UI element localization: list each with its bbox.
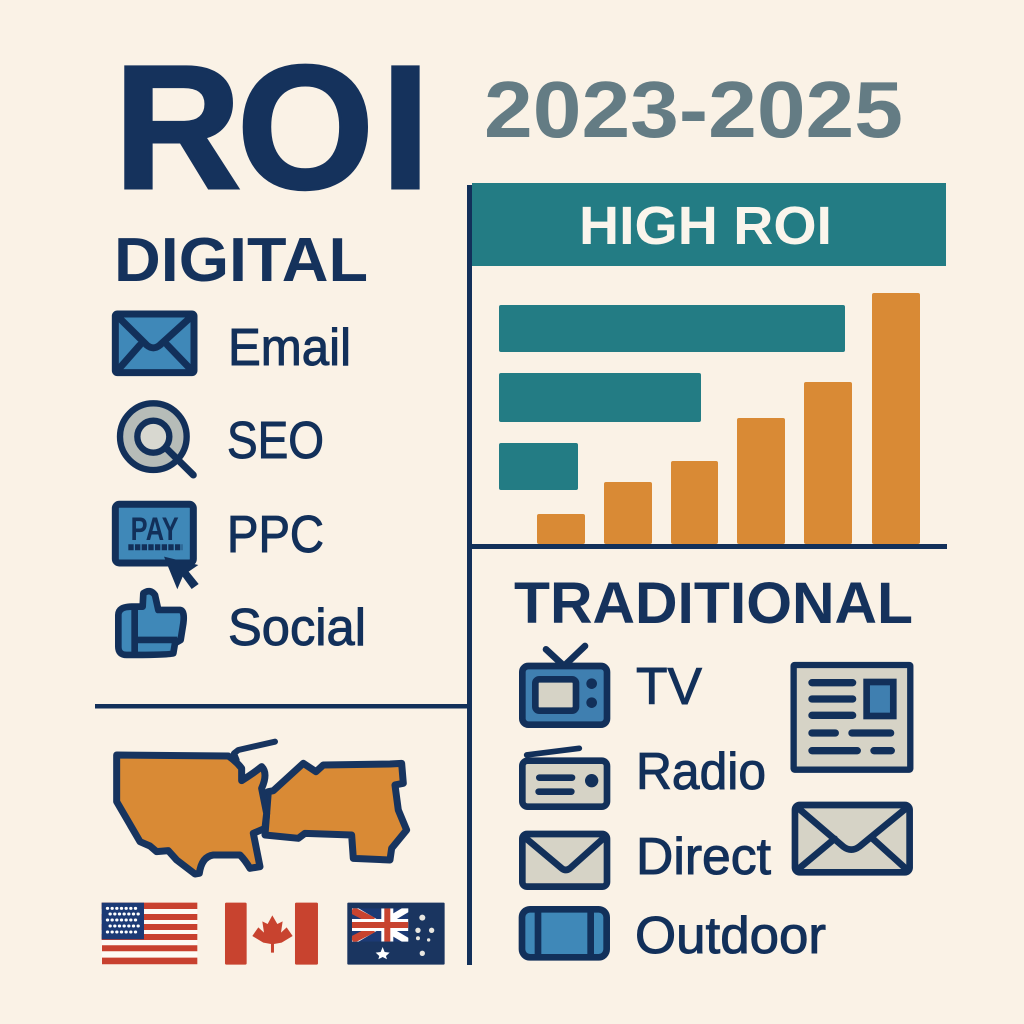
icon: SEO magnifier <box>120 403 193 475</box>
icon: social thumbs up <box>118 591 184 655</box>
icon: direct mail <box>522 834 607 887</box>
icon: email <box>115 314 194 373</box>
label: PPC: PPC <box>227 506 324 564</box>
title: ROI: ROI <box>114 30 430 226</box>
label: Outdoor: Outdoor <box>635 907 826 965</box>
label: SEO: SEO <box>227 412 324 470</box>
divider: left horizontal <box>95 704 469 708</box>
icon: PPC pay button <box>115 504 199 589</box>
flag: Canada <box>225 903 318 965</box>
chart: teal horizontal bars <box>499 305 845 490</box>
icon: TV <box>522 646 607 725</box>
icon: outdoor billboard <box>522 909 607 957</box>
flag: Australia <box>347 903 445 965</box>
label: Direct: Direct <box>636 828 772 886</box>
flag: United States <box>102 903 197 964</box>
banner: high ROI <box>472 183 946 266</box>
map: North America outline <box>117 742 407 874</box>
divider: center vertical <box>467 185 472 965</box>
icon: radio <box>522 748 607 807</box>
banner: high ROI: HIGH ROI <box>579 196 832 256</box>
chart: orange vertical bars <box>537 293 920 544</box>
heading: digital: DIGITAL <box>114 226 368 295</box>
icon: newspaper <box>794 665 910 770</box>
label: Social: Social <box>228 599 366 657</box>
icon: large envelope <box>795 805 910 872</box>
title: date range: 2023-2025 <box>484 65 903 154</box>
heading: traditional: TRADITIONAL <box>514 571 913 636</box>
label: Email: Email <box>228 319 351 377</box>
divider: chart baseline <box>472 544 947 549</box>
label: Radio: Radio <box>636 743 766 801</box>
label: TV: TV <box>636 658 702 716</box>
icon: PPC pay button: PAY <box>131 510 179 547</box>
